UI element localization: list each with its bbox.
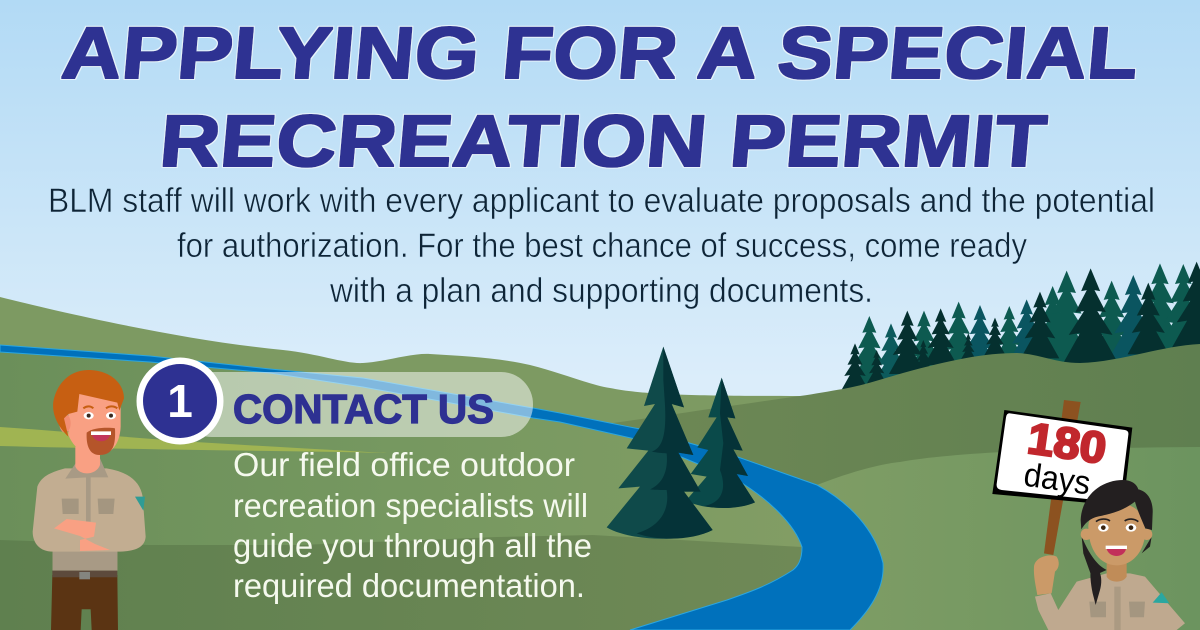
- step heading: CONTACT US: [233, 386, 494, 432]
- shirt: [1035, 573, 1185, 630]
- mouth: [91, 431, 111, 441]
- far left hill: [0, 297, 800, 630]
- female ranger with sign: [992, 400, 1185, 630]
- eyes: [83, 406, 117, 419]
- lime meadow strip: [0, 427, 387, 453]
- eyes: [1096, 519, 1138, 532]
- sleeve badge: [1153, 592, 1169, 603]
- step description: required documentation.: [233, 567, 585, 604]
- dark foreground hill: [0, 535, 802, 630]
- raised hand and arm: [1034, 555, 1059, 595]
- intro text: with a plan and supporting documents.: [329, 272, 873, 310]
- beard: [87, 428, 115, 455]
- placket: [1114, 587, 1121, 630]
- ear: [59, 414, 71, 433]
- pockets: [1089, 602, 1145, 617]
- sign post: [1044, 400, 1081, 555]
- intro text: for authorization. For the best chance of success, come ready: [177, 227, 1027, 265]
- braid: [1090, 565, 1101, 605]
- large pine tree: [607, 347, 713, 539]
- face: [1088, 503, 1145, 565]
- title: RECREATION PERMIT: [157, 101, 1050, 182]
- placket and collar: [65, 458, 108, 522]
- ears: [1081, 529, 1152, 540]
- hair back: [1082, 537, 1152, 577]
- neck: [1107, 562, 1127, 582]
- sleeve badge: [135, 497, 145, 511]
- lower right bank: [817, 447, 1200, 630]
- neck: [75, 447, 100, 473]
- step number badge: [136, 358, 224, 444]
- step pill background: [180, 372, 533, 437]
- step description: Our field office outdoor: [233, 446, 575, 483]
- left river bank: [0, 352, 802, 630]
- right hill: [613, 344, 1200, 630]
- belt: [52, 571, 117, 579]
- trousers: [51, 575, 118, 630]
- hair: [53, 370, 124, 437]
- sign text: days: days: [1022, 457, 1093, 503]
- head: [68, 390, 121, 455]
- step description: [233, 446, 592, 604]
- title: APPLYING FOR A SPECIAL: [59, 13, 1142, 94]
- river: [0, 345, 883, 630]
- shirt torso: [33, 468, 146, 571]
- mouth: [1106, 546, 1127, 556]
- intro text: [48, 182, 1155, 310]
- sign board: [992, 410, 1132, 506]
- step description: recreation specialists will: [233, 487, 588, 524]
- title: [59, 13, 1142, 182]
- hair: [1081, 480, 1153, 530]
- step description: guide you through all the: [233, 527, 592, 564]
- sign text: 180: 180: [1025, 414, 1109, 474]
- small pine tree: [686, 378, 755, 508]
- distant forest: [841, 262, 1200, 390]
- crossed arms: [54, 519, 110, 551]
- intro text: BLM staff will work with every applicant to evaluate proposals and the potential: [48, 182, 1155, 220]
- shirt pockets: [62, 499, 115, 514]
- male ranger character: [33, 370, 146, 630]
- step number badge: 1: [167, 375, 193, 427]
